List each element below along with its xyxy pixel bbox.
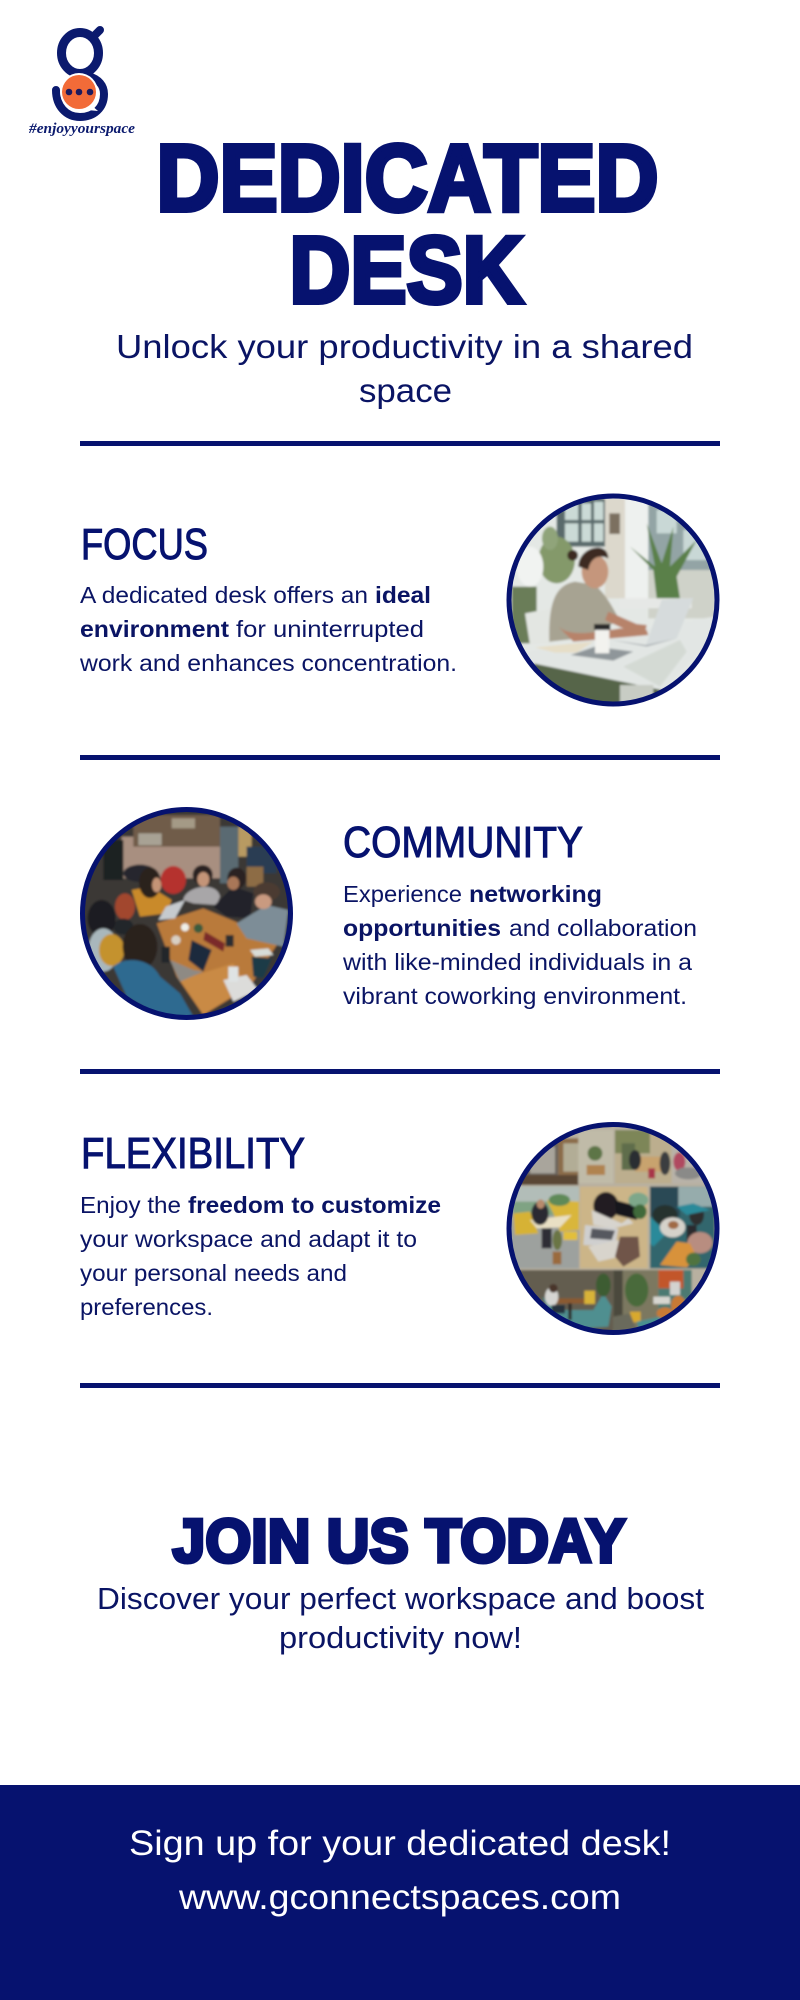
panel: flexibility: [80, 1120, 723, 1340]
text block: community description: with like-minded individuals in a: [342, 949, 692, 975]
text block: community description: vibrant coworking environment.: [343, 983, 687, 1009]
logo: [28, 30, 135, 137]
title: [156, 126, 658, 324]
text block: community description: and collaboration: [509, 915, 697, 941]
subtitle: space: [359, 372, 452, 409]
text block: join us description: [97, 1581, 704, 1655]
footer banner: Sign up for your dedicated desk!: [129, 1824, 671, 1863]
title: DEDICATED: [156, 126, 658, 232]
text block: community description: networking: [469, 881, 602, 907]
photo: woman working on laptop: [506, 494, 720, 706]
logo: #enjoyyourspace: [28, 121, 135, 137]
text block: flexibility description: Enjoy the: [80, 1192, 181, 1218]
text block: community description: opportunities: [343, 915, 501, 941]
text block: focus description: A dedicated desk offers an: [80, 582, 368, 608]
text block: focus description: environment: [80, 616, 229, 642]
text block: flexibility description: [80, 1192, 441, 1320]
text block: focus description: work and enhances concentration.: [79, 650, 457, 676]
heading: flexibility: FLEXIBILITY: [81, 1129, 305, 1178]
text block: flexibility description: your workspace and adapt it to: [80, 1226, 417, 1252]
text block: flexibility description: preferences.: [80, 1294, 213, 1320]
text block: focus description: ideal: [375, 582, 431, 608]
text block: join us description: Discover your perfect workspace and boost: [97, 1581, 704, 1616]
text block: join us description: productivity now!: [279, 1620, 522, 1655]
heading: join us today: JOIN US TODAY: [172, 1507, 626, 1576]
text block: community description: [342, 881, 697, 1009]
panel: community: [77, 807, 697, 1027]
subtitle: [116, 328, 693, 409]
heading: focus: FOCUS: [81, 520, 208, 569]
footer banner: www.gconnectspaces.com: [178, 1878, 621, 1917]
footer banner: [0, 1785, 800, 2000]
photo: collage of workspaces: [503, 1120, 723, 1340]
photo: team around a table: [77, 807, 297, 1027]
text block: flexibility description: freedom to customize: [188, 1192, 441, 1218]
panel: focus: [79, 490, 727, 717]
heading: community: COMMUNITY: [343, 818, 583, 867]
text block: community description: Experience: [343, 881, 462, 907]
text block: focus description: for uninterrupted: [236, 616, 424, 642]
title: DESK: [290, 218, 524, 324]
text block: focus description: [79, 582, 457, 676]
text block: flexibility description: your personal needs and: [80, 1260, 347, 1286]
subtitle: Unlock your productivity in a shared: [116, 328, 693, 365]
